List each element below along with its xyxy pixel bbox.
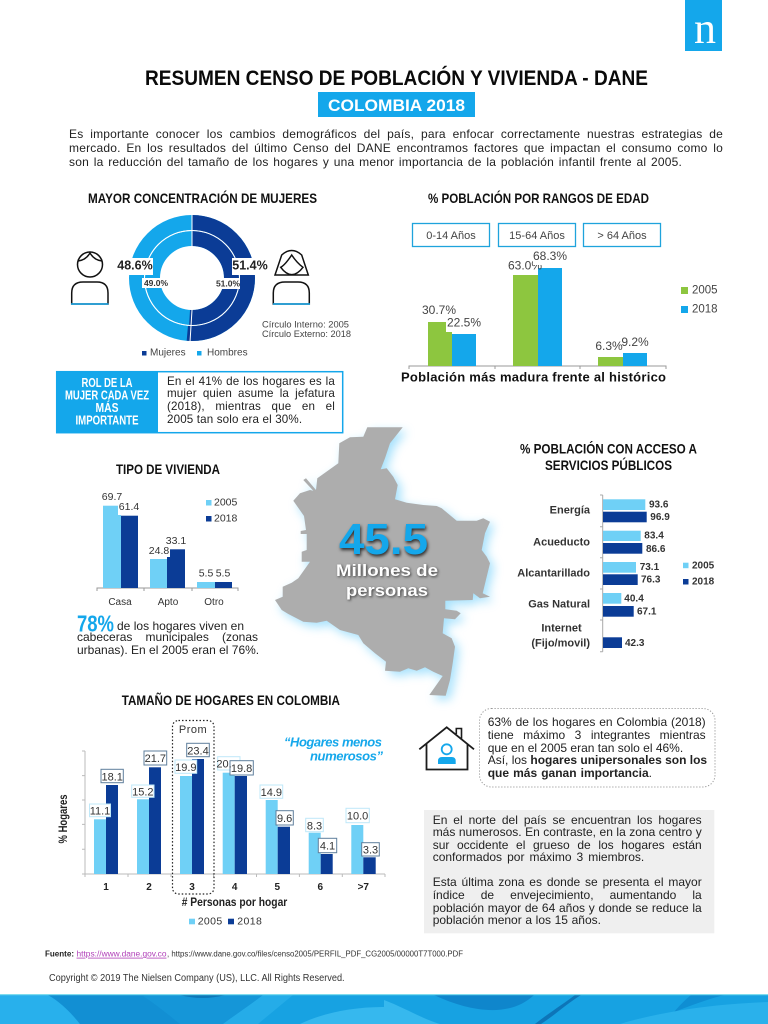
callout: rol de la mujer — [56, 371, 343, 433]
callout: rol de la mujer: ROL DE LA — [82, 376, 132, 390]
hogares value labels: 18.1 — [101, 772, 123, 784]
hogares value labels: 23.4 — [187, 746, 209, 758]
bar chart: servicios: Gas Natural — [528, 599, 590, 611]
donut note — [262, 320, 351, 340]
hogares value labels: 4.1 — [320, 840, 335, 852]
bar chart: vivienda: 5.5 — [199, 568, 213, 580]
donut legend: Mujeres — [150, 348, 186, 359]
donut legend — [142, 348, 248, 359]
callout: rol de la mujer: MUJER CADA VEZ — [65, 388, 149, 402]
donut chart: 49.0% — [144, 278, 168, 288]
bar chart: servicios: 42.3 — [625, 638, 645, 649]
hogares value labels: 8.3 — [307, 820, 322, 832]
bar chart: vivienda: 5.5 — [216, 568, 230, 580]
servicios legend: 2018 — [692, 576, 715, 587]
stat text — [77, 619, 262, 659]
population caption: Millones de — [336, 562, 438, 580]
panel: norte y sur — [424, 810, 714, 933]
intro paragraph: mercado. En los resultados del último Censo del DANE encontramos factores que impactan el consumo como lo — [69, 141, 723, 155]
panel: norte y sur: población menor a los 15 años. — [433, 913, 601, 927]
bar chart: servicios — [517, 495, 670, 652]
servicios legend — [683, 560, 715, 587]
bar chart: vivienda: Otro — [204, 597, 224, 608]
title: RESUMEN CENSO DE POBLACIÓN Y VIVIENDA - DANE — [145, 66, 648, 90]
servicios legend: 2005 — [692, 560, 715, 571]
hogares legend — [189, 915, 262, 927]
panel: población por rangos de edad — [401, 189, 718, 385]
vivienda legend — [206, 497, 238, 524]
heading: servicios: % POBLACIÓN CON ACCESO A — [520, 439, 697, 456]
bar chart: hogares: 6 — [318, 882, 324, 893]
panel: norte y sur: más numerosos. En contraste, en la zona centro y — [433, 825, 702, 839]
stat text: urbanas). En el 2005 eran el 76%. — [77, 643, 259, 657]
age range boxes — [412, 224, 660, 246]
callout: rol de la mujer: (2018), mientras que en el — [167, 400, 335, 413]
bar chart: vivienda — [97, 491, 238, 608]
callout: 63% hogares: que más ganan importancia. — [488, 766, 652, 780]
population figure: 45.5 — [339, 515, 428, 564]
panel: norte y sur: sur occidente el grueso de los hogares están — [433, 838, 702, 852]
panel: norte y sur: índice de envejecimiento, aumentando la — [433, 888, 702, 902]
bar chart: vivienda: 24.8 — [149, 545, 169, 557]
source line: , https://www.dane.gov.co/files/censo2005/PERFIL_PDF_CG2005/00000T7T000.PDF — [167, 950, 463, 959]
intro paragraph: Es importante conocer los cambios demográficos del país, para enfocar correctamente nuestras estrategias de — [69, 127, 723, 141]
population caption: personas — [346, 582, 428, 600]
source line — [45, 950, 463, 959]
callout: rol de la mujer: IMPORTANTE — [76, 414, 138, 428]
hogares value labels: 10.0 — [347, 810, 368, 822]
heading: hogares: TAMAÑO DE HOGARES EN COLOMBIA — [122, 691, 340, 708]
callout: rol de la mujer: MÁS — [96, 400, 118, 415]
heading: mujeres: MAYOR CONCENTRACIÓN DE MUJERES — [88, 189, 317, 206]
vivienda legend: 2005 — [214, 497, 238, 509]
chart caption: Población más madura frente al histórico — [401, 370, 666, 385]
bar chart: hogares: 4 — [232, 882, 238, 893]
callout: 63% hogares: Así, los hogares unipersonales son los — [488, 753, 707, 767]
bar chart: servicios: 76.3 — [641, 575, 661, 586]
panel: servicios públicos — [517, 439, 715, 652]
bar chart: hogares: 1 — [103, 882, 109, 893]
donut legend: Hombres — [207, 348, 248, 359]
bar chart: age: 22.5% — [447, 316, 481, 330]
bar chart: servicios: 93.6 — [649, 500, 669, 511]
age legend: 2018 — [692, 304, 718, 316]
bar chart: age: 30.7% — [422, 303, 456, 317]
population caption — [336, 562, 438, 600]
bar chart: vivienda: 69.7 — [102, 491, 122, 503]
donut chart: 48.6% — [117, 258, 153, 272]
intro paragraph — [69, 127, 725, 171]
subtitle badge: COLOMBIA 2018 — [328, 96, 465, 115]
source line: Fuente: — [45, 950, 74, 959]
stat: 78%: 78% — [77, 611, 114, 637]
bar chart: servicios: 73.1 — [640, 562, 660, 573]
hogares value labels: 11.1 — [90, 806, 110, 818]
icon: woman — [273, 250, 310, 304]
map of Colombia — [275, 427, 494, 700]
hogares value labels: 15.2 — [132, 786, 154, 798]
heading: servicios: SERVICIOS PÚBLICOS — [545, 456, 672, 473]
bar chart: vivienda: 61.4 — [119, 501, 139, 513]
hogares value labels: 19.8 — [231, 763, 252, 775]
hogares value labels: 19.9 — [175, 762, 197, 774]
donut chart — [117, 214, 268, 342]
bar chart: servicios: 40.4 — [624, 593, 644, 604]
bar chart: servicios: 67.1 — [637, 607, 657, 618]
bar chart: hogares: 2 — [146, 882, 152, 893]
bar chart: servicios: Acueducto — [533, 537, 590, 549]
age legend: 2005 — [692, 284, 718, 296]
bar chart: hogares: 5 — [275, 882, 281, 893]
highlight: prom — [172, 720, 214, 894]
age range boxes: 0-14 Años — [426, 230, 476, 242]
bar chart: age — [409, 249, 666, 369]
heading: servicios — [520, 439, 697, 473]
hogares legend: 2005 — [198, 915, 223, 927]
quote: “Hogares menos — [284, 735, 382, 750]
bar chart: servicios: Alcantarillado — [517, 568, 590, 580]
heading: rangos de edad: % POBLACIÓN POR RANGOS DE EDAD — [428, 189, 649, 206]
panel: norte y sur: población mayor de 64 años y donde se reduce la — [433, 901, 702, 915]
intro paragraph: son la reducción del tamaño de los hogares y una menor importancia de la población infantil frente al 2005. — [69, 155, 682, 169]
source line: https://www.dane.gov.co — [76, 950, 167, 959]
heading: vivienda: TIPO DE VIVIENDA — [116, 461, 220, 477]
quote — [284, 735, 384, 764]
bar chart: age: 68.3% — [533, 249, 567, 263]
callout: 63% hogares: tiene máximo 3 integrantes mientras — [488, 728, 706, 742]
donut note: Círculo Externo: 2018 — [262, 329, 351, 340]
bar chart: age: 63.0% — [508, 258, 542, 272]
highlight: prom: Prom — [179, 724, 207, 736]
copyright: Copyright © 2019 The Nielsen Company (US), LLC. All Rights Reserved. — [49, 973, 345, 984]
hogares value labels: 14.9 — [261, 787, 282, 799]
bar chart: age: 9.2% — [621, 335, 649, 349]
x axis title: # Personas por hogar — [182, 895, 288, 909]
age range boxes: 15-64 Años — [509, 230, 565, 242]
panel: mayor concentración de mujeres — [71, 189, 351, 359]
hogares value labels — [90, 743, 379, 856]
bar chart: servicios: 83.4 — [644, 531, 664, 542]
bar chart: hogares — [82, 743, 385, 893]
bar chart: vivienda: Casa — [108, 597, 132, 608]
bar chart: servicios: 86.6 — [646, 544, 666, 555]
callout: 63% hogares — [480, 708, 715, 787]
donut note: Círculo Interno: 2005 — [262, 320, 349, 330]
age legend — [681, 284, 718, 316]
hogares value labels: 21.7 — [145, 753, 166, 765]
panel: tamaño de hogares — [58, 691, 385, 927]
hogares value labels: 3.3 — [363, 844, 378, 856]
vivienda legend: 2018 — [214, 512, 238, 524]
bar chart: vivienda: 33.1 — [166, 535, 186, 547]
hogares legend: 2018 — [237, 915, 262, 927]
donut chart: 51.4% — [232, 258, 268, 272]
hogares value labels: 20. — [216, 758, 232, 770]
stat text: de los hogares viven en — [117, 619, 244, 633]
hogares value labels: 9.6 — [277, 813, 292, 825]
icon: man — [71, 252, 108, 304]
callout: 63% hogares: que en el 2005 eran tan solo el 46%. — [488, 740, 683, 754]
y axis title: % Hogares — [58, 794, 70, 844]
bar chart: servicios: Energía — [550, 504, 591, 516]
stat text: cabeceras municipales (zonas — [77, 630, 258, 644]
callout: rol de la mujer: 2005 tan solo era el 30%. — [167, 413, 302, 426]
icon: house — [419, 727, 474, 770]
panel: norte y sur: conformados por máximo 3 miembros. — [433, 850, 644, 864]
bar chart: servicios: (Fijo/movil) — [531, 638, 590, 650]
bar chart: servicios: Internet — [541, 623, 582, 635]
quote: numerosos” — [310, 749, 384, 764]
bar chart: servicios: 96.9 — [650, 512, 670, 523]
panel: tipo de vivienda — [77, 461, 262, 659]
age range boxes: > 64 Años — [597, 230, 647, 242]
logo — [685, 0, 722, 53]
bar chart: age: 6.3% — [595, 339, 623, 353]
bar chart: vivienda: Apto — [158, 597, 179, 608]
callout: rol de la mujer: mujer quien asume la jefatura — [167, 387, 335, 400]
donut chart: 51.0% — [216, 278, 240, 288]
subtitle badge — [318, 92, 475, 117]
bar chart: hogares: >7 — [358, 882, 369, 893]
bar chart: hogares: 3 — [189, 882, 195, 893]
footer wave band — [0, 994, 768, 1024]
logo: n — [694, 4, 716, 53]
